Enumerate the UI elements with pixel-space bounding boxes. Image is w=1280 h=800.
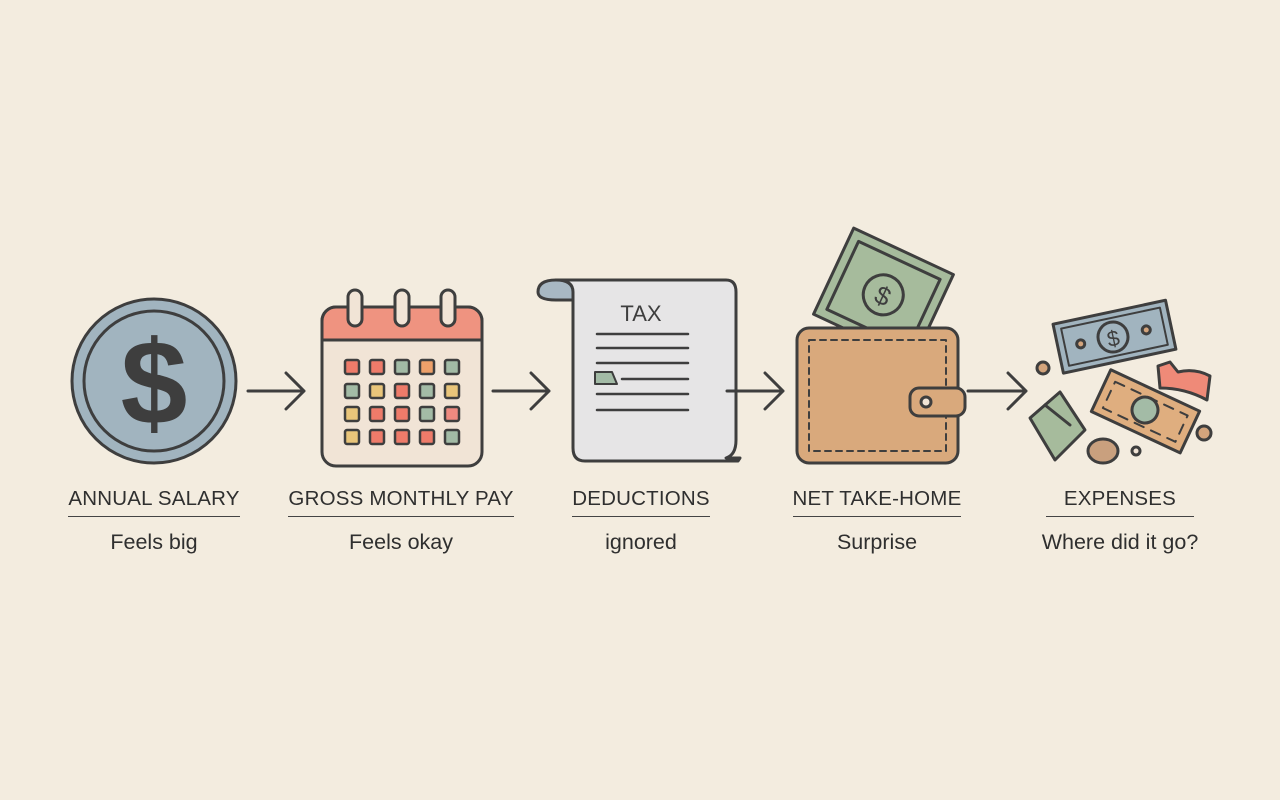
icon: wallet with bill: $ [870, 279, 896, 313]
label: net take-home: NET TAKE-HOME [793, 487, 961, 510]
label: expenses: Where did it go? [1042, 530, 1198, 554]
label: gross monthly pay [288, 487, 514, 554]
icon: tax document [538, 280, 740, 461]
label: annual salary [68, 487, 240, 554]
icon: coin [72, 299, 236, 463]
label: net take-home: Surprise [837, 530, 917, 554]
icon: wallet with bill [797, 228, 965, 463]
label: annual salary: ANNUAL SALARY [68, 487, 240, 510]
label: net take-home [793, 487, 961, 554]
icon: calendar [322, 290, 482, 466]
arrow 3 [727, 373, 783, 409]
arrow 1 [248, 373, 304, 409]
icon: tax document: TAX [620, 301, 662, 326]
arrow 4 [968, 373, 1026, 409]
arrow 2 [493, 373, 549, 409]
label: expenses: EXPENSES [1064, 487, 1176, 510]
icon: coin: $ [121, 316, 187, 450]
label: gross monthly pay: GROSS MONTHLY PAY [288, 487, 514, 510]
label: deductions [572, 487, 710, 554]
label: deductions: DEDUCTIONS [572, 487, 710, 510]
label: expenses [1042, 487, 1198, 554]
label: deductions: ignored [605, 530, 677, 554]
label: annual salary: Feels big [110, 530, 198, 554]
icon: scattered money: $ [1105, 325, 1122, 352]
icon: scattered money [1030, 300, 1211, 463]
label: gross monthly pay: Feels okay [349, 530, 453, 554]
